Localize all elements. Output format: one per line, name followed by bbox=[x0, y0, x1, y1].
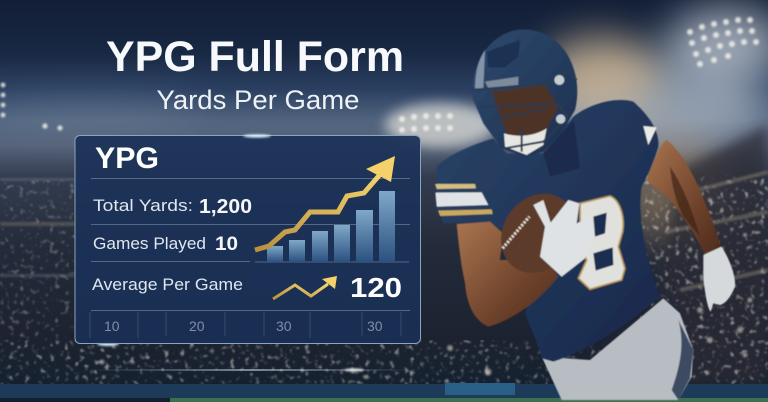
arrow: rising gold trend bbox=[255, 156, 395, 250]
player: face bbox=[492, 85, 558, 135]
subtitle: Yards Per Game bbox=[156, 85, 360, 115]
stat: games played: 10 bbox=[215, 234, 238, 255]
player: helmet bbox=[472, 29, 577, 157]
jersey number bbox=[578, 196, 625, 289]
player: football runner bbox=[435, 29, 735, 400]
arrow: small trend bbox=[273, 276, 337, 299]
stat: total yards bbox=[93, 196, 252, 218]
player: pants bbox=[542, 298, 693, 400]
player: forearm bbox=[457, 222, 558, 327]
crowd texture bbox=[0, 175, 768, 385]
panel: YPG stats bbox=[75, 134, 420, 344]
player: glove left bbox=[533, 200, 594, 277]
player: neck bbox=[543, 120, 577, 160]
stat: total yards: Total Yards: bbox=[93, 196, 193, 215]
axis labels bbox=[90, 312, 401, 338]
title: YPG Full Form bbox=[106, 33, 404, 81]
axis labels: 30 bbox=[276, 318, 292, 334]
axis labels: 10 bbox=[104, 318, 120, 334]
axis labels: 20 bbox=[189, 318, 205, 334]
stat: average per game: 120 bbox=[350, 272, 402, 303]
player: trailing arm bbox=[647, 140, 722, 255]
stat: average per game bbox=[92, 272, 402, 303]
player: sleeve stripes bbox=[435, 184, 493, 216]
stat: total yards: 1,200 bbox=[199, 196, 252, 218]
player: jersey bbox=[437, 100, 660, 362]
stat: games played bbox=[93, 234, 238, 255]
panel heading: YPG bbox=[95, 142, 159, 175]
bar chart bbox=[267, 191, 395, 262]
stat: games played: Games Played bbox=[93, 234, 206, 253]
football bbox=[486, 179, 591, 288]
stat: average per game: Average Per Game bbox=[92, 275, 243, 294]
axis labels: 30 bbox=[367, 318, 383, 334]
player: glove right bbox=[703, 247, 735, 312]
